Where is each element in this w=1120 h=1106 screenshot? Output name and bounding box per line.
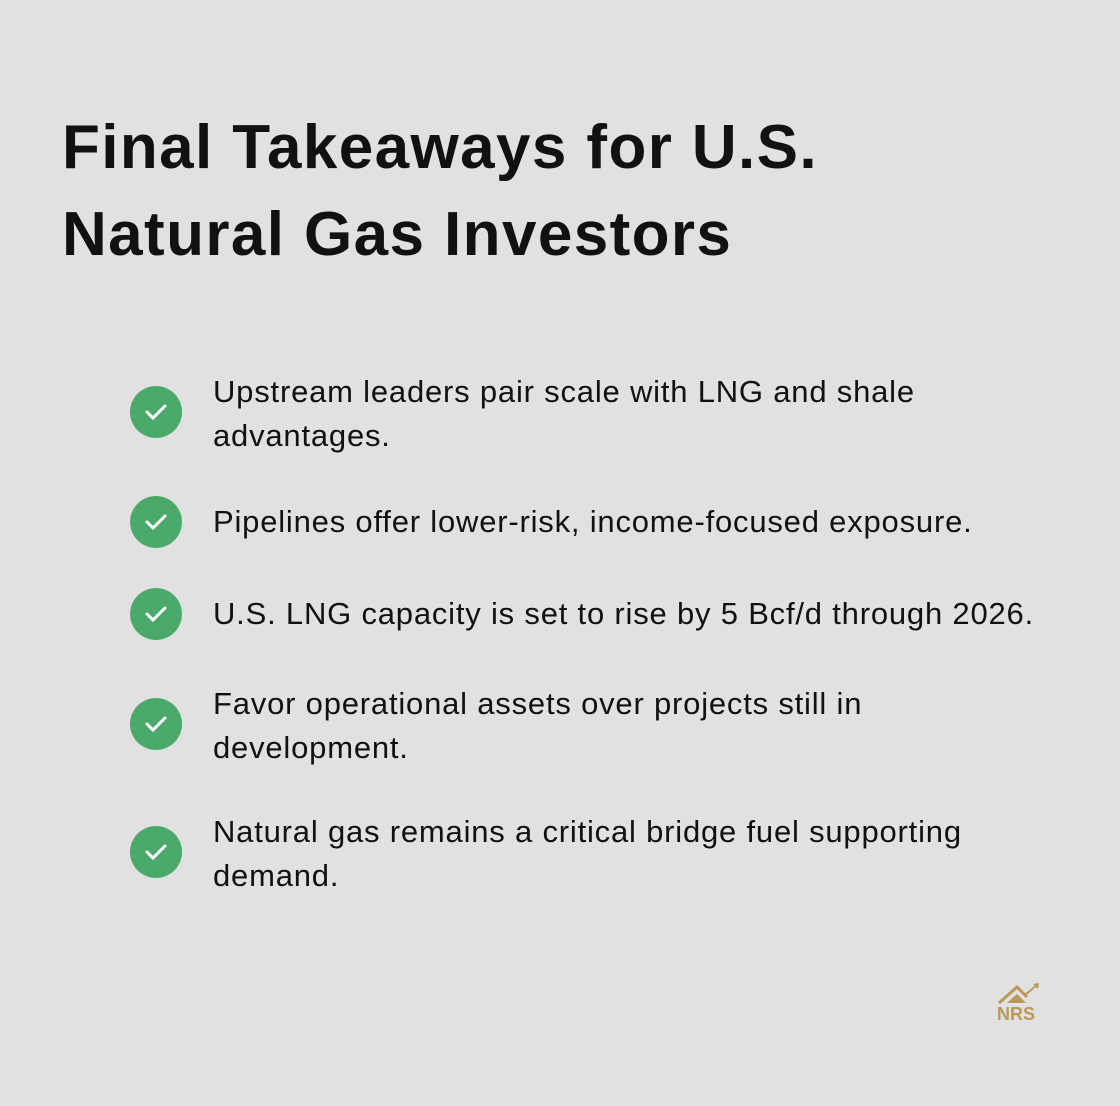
text: Pipelines offer lower-risk, income-focused exposure. [213, 504, 973, 539]
text: Natural gas remains a critical bridge fuel supporting [213, 814, 962, 849]
text: Favor operational assets over projects still in [213, 686, 862, 721]
icon: check [130, 826, 182, 878]
icon: check [130, 386, 182, 438]
logo: NRS [997, 983, 1039, 1024]
logo: NRS: NRS [997, 1004, 1035, 1024]
item 4 [130, 686, 862, 765]
text: advantages. [213, 418, 391, 453]
title [62, 113, 818, 269]
icon: check [130, 588, 182, 640]
item 5 [130, 814, 962, 893]
text: demand. [213, 858, 339, 893]
title: Final Takeaways for U.S. [62, 113, 818, 182]
icon: check [130, 698, 182, 750]
text: Upstream leaders pair scale with LNG and shale [213, 374, 915, 409]
text [213, 814, 962, 893]
text: U.S. LNG capacity is set to rise by 5 Bcf/d through 2026. [213, 596, 1034, 631]
title: Natural Gas Investors [62, 200, 732, 269]
icon: check [130, 496, 182, 548]
item 1 [130, 374, 915, 453]
item 3 [130, 588, 1034, 640]
text [213, 686, 862, 765]
text [213, 374, 915, 453]
item 2 [130, 496, 973, 548]
text: development. [213, 730, 409, 765]
